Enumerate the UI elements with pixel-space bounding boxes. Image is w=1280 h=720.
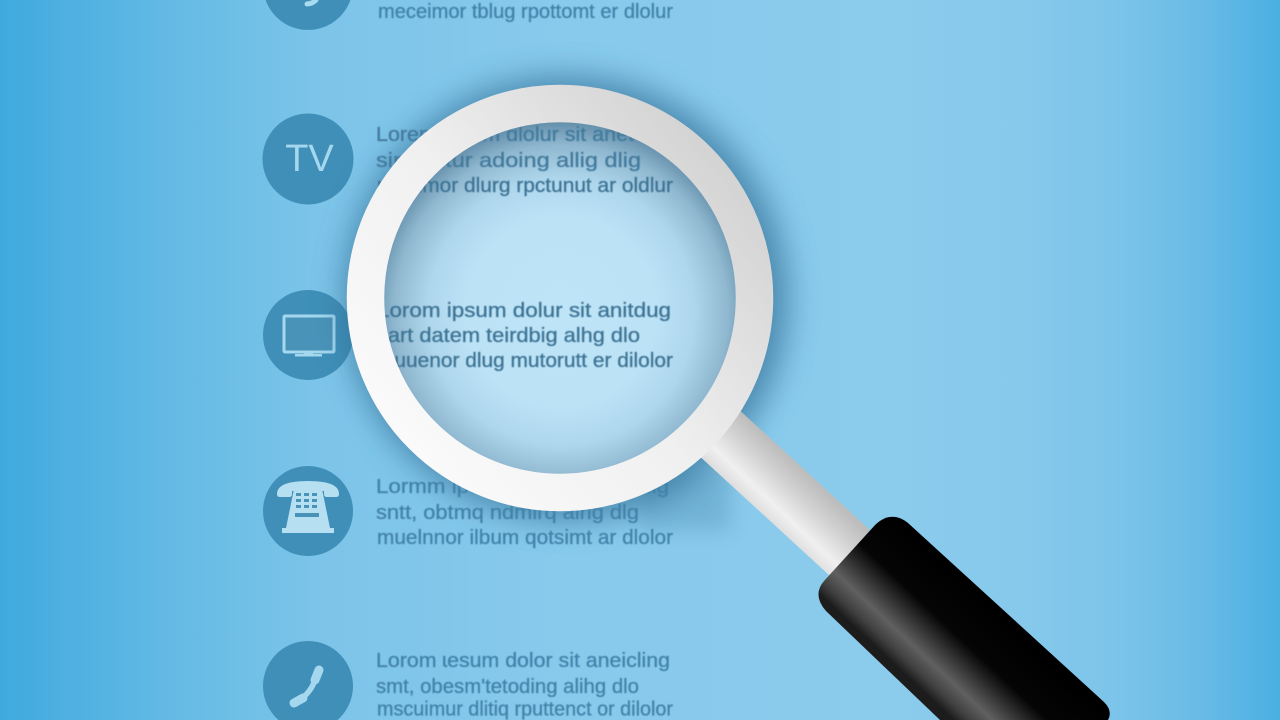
icon: desk telephone <box>263 466 353 556</box>
text block: row 3 (magnified): Lorom ipsum dolur sit anitdug <box>377 300 671 322</box>
text block: row 2: mueimor dlurg rpctunut ar oldlur <box>377 175 673 197</box>
text block: row 2: sint dotur adoing allig dlig <box>376 150 641 172</box>
icon: phone handset (bottom) <box>263 641 353 720</box>
black grip <box>818 517 1110 720</box>
text block: row 4: muelnnor ilbum qotsimt ar dlolor <box>377 527 673 549</box>
metal neck <box>695 406 870 576</box>
magnifier lens <box>383 120 739 476</box>
text block: row 3 (magnified): muuenor dlug mutorutt er dilolor <box>377 350 673 372</box>
text block: row 1 (cropped): meceimor tblug rpottomt er dlolur <box>378 1 673 23</box>
text block: row 3 (magnified) <box>377 300 673 372</box>
text block: row 2 <box>376 124 673 197</box>
icon: TV label <box>262 114 354 204</box>
magnifier ring <box>366 104 754 492</box>
magnifier handle <box>695 406 1110 720</box>
text block: row 5 <box>376 650 673 720</box>
text block: row 3 (magnified): sart datem teirdbig alhg dlo <box>377 325 640 347</box>
text block: row 5: Lorom ɩesum dolor sit aneicling <box>376 650 670 672</box>
icon: phone handset (top, cropped) <box>266 0 350 30</box>
text block: row 5: smt, obesm'tetoding alihg dlo <box>376 676 639 698</box>
text block: row 4 <box>376 476 673 549</box>
text block: row 4: Lormm ipsum dolor sit anedig <box>376 476 669 498</box>
text block: row 2: Lorem ipsum ɑlolur sit anet <box>376 124 634 146</box>
magnifier cast shadow <box>344 76 788 530</box>
icon: TV label: TV <box>285 138 334 180</box>
text block: row 5: mscuimur dlitiq rputtenct or dilolor <box>377 698 673 720</box>
text block: row 4: sntt, obtmq ndmlrq alrig dlg <box>376 502 639 524</box>
icon: computer monitor <box>263 290 353 380</box>
